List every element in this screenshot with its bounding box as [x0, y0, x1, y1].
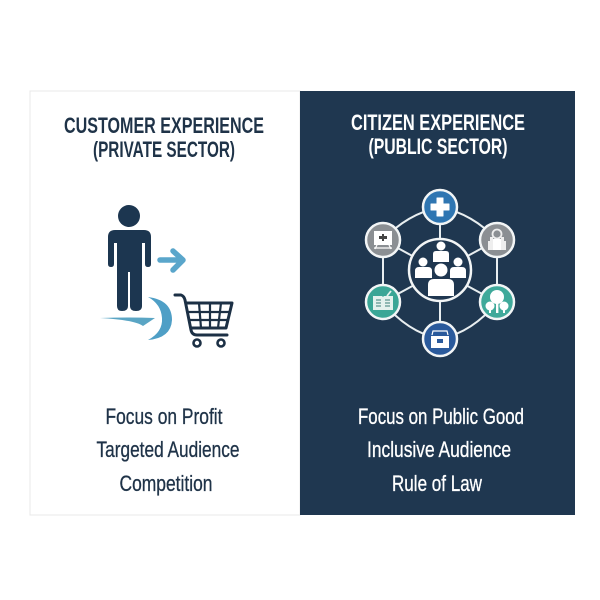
heading: customer experience: [64, 113, 264, 162]
panel: citizen experience: [300, 91, 575, 515]
icon: person: [108, 205, 151, 311]
text: customer experience points: Competition: [120, 471, 212, 496]
text: citizen experience points: Rule of Law: [392, 471, 482, 496]
icon: arrow to cart: [160, 251, 183, 270]
heading: citizen experience: CITIZEN EXPERIENCE: [351, 110, 525, 135]
text: customer experience points: Targeted Audience: [96, 437, 240, 462]
node: environment: [480, 285, 514, 319]
diagram: connected public services: [366, 190, 514, 356]
heading: citizen experience: (PUBLIC SECTOR): [368, 134, 508, 159]
heading: customer experience: (PRIVATE SECTOR): [93, 137, 235, 162]
node: education: [366, 285, 400, 319]
panel: customer experience: [30, 91, 300, 515]
node: government building: [480, 223, 514, 257]
node: health: [423, 190, 457, 224]
icon: swoosh: [100, 297, 172, 340]
text: citizen experience points: [358, 404, 524, 496]
heading: citizen experience: [351, 110, 525, 159]
node: digital services: [423, 322, 457, 356]
center: citizens group: [409, 239, 471, 301]
text: customer experience points: [96, 404, 240, 496]
heading: customer experience: CUSTOMER EXPERIENCE: [64, 113, 264, 138]
node: clinic sign: [366, 223, 400, 257]
icon: shopping cart: [175, 295, 232, 346]
text: citizen experience points: Inclusive Audience: [367, 437, 511, 462]
text: customer experience points: Focus on Profit: [106, 404, 222, 429]
text: citizen experience points: Focus on Public Good: [358, 404, 524, 429]
